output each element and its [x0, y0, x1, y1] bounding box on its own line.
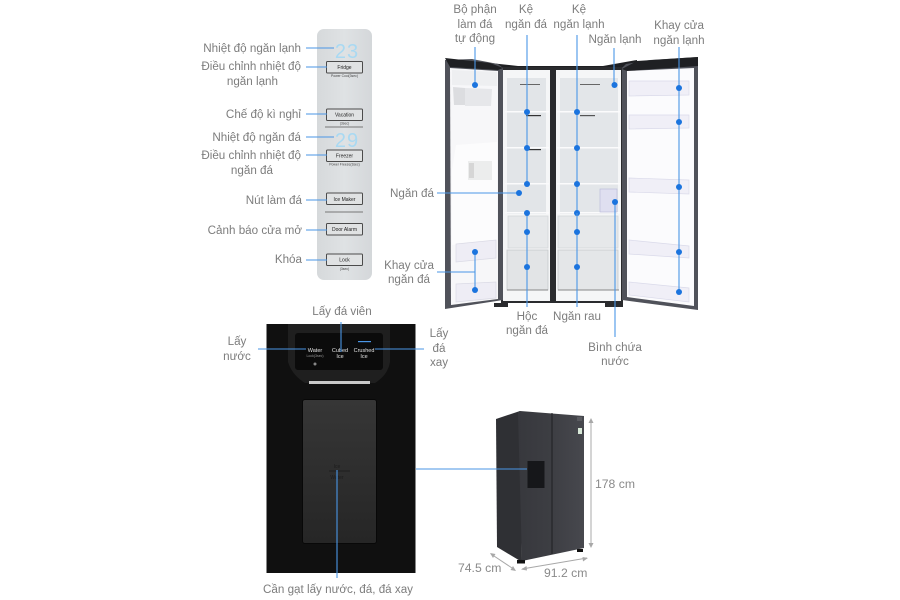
callout: fridge door tray: Khay cửa: [654, 19, 704, 32]
open refrigerator: [445, 57, 698, 310]
freezer compartment: [503, 70, 550, 301]
lock button: [326, 254, 362, 271]
callout: freezer compartment: [390, 187, 522, 200]
dimension: depth: [458, 553, 516, 575]
callout: water: nước: [223, 350, 251, 363]
label: adjust fridge temperature: Điều chỉnh nhiệt độ: [201, 60, 301, 73]
callout: vegetable drawer: Ngăn rau: [553, 310, 601, 323]
callout: fridge shelf: Kệ: [572, 3, 586, 16]
label: ice maker: [246, 194, 327, 207]
dispenser paddle: Water: [330, 475, 344, 481]
dispenser paddle: [302, 399, 377, 544]
dispenser display: Water: [308, 348, 322, 354]
callout: freezer door tray: [384, 249, 478, 293]
vacation button: Vacation: [335, 112, 354, 118]
freezer button: Power Freeze(3sec): [329, 162, 360, 166]
callouts: dispenser: [223, 305, 449, 596]
freezer button: Freezer: [336, 154, 353, 160]
freezer button: [326, 150, 362, 166]
dimension: depth: 74.5 cm: [458, 561, 501, 575]
callout: water tank: [588, 199, 642, 368]
callout: automatic ice maker: Bộ phận: [453, 3, 497, 16]
freezer temperature display: 29: [335, 130, 359, 152]
callout: crushed ice: xay: [430, 356, 448, 369]
dispenser display: Lock(3sec): [306, 354, 324, 358]
dimension: height: 178 cm: [595, 477, 635, 491]
ice maker button: Ice Maker: [334, 197, 356, 203]
callout: fridge door tray: [653, 19, 705, 295]
label: lock: [275, 253, 327, 266]
callout: freezer shelf: [505, 3, 548, 187]
panel body: [317, 29, 372, 280]
left door: [445, 58, 503, 309]
lock button: Lock: [339, 258, 350, 264]
dimension: height: [588, 418, 635, 548]
callout: crushed ice: đá: [433, 342, 446, 355]
lock button: (3sec): [340, 267, 349, 271]
callout: fridge shelf: ngăn lạnh: [553, 18, 605, 31]
right door: [622, 57, 698, 310]
fridge button: Fridge: [337, 65, 352, 71]
callout: fridge shelf: [553, 3, 605, 216]
callout: fridge compartment: Ngăn lạnh: [588, 33, 642, 46]
dispenser display: Cubed: [332, 348, 348, 354]
callout: freezer drawer: Hộc: [517, 310, 538, 323]
callout: crushed ice: Lấy: [430, 327, 449, 340]
fridge button: [326, 62, 362, 78]
label: freezer temperature: Nhiệt độ ngăn đá: [212, 131, 302, 144]
label: door alarm: Cảnh báo cửa mở: [208, 224, 302, 237]
label: ice maker: Nút làm đá: [246, 194, 303, 207]
vacation button: (3sec): [340, 122, 349, 126]
dispenser display: Crushed: [354, 348, 374, 354]
callout: automatic ice maker: tự động: [455, 32, 495, 45]
callout: water: [223, 335, 306, 363]
fridge compartment: [556, 70, 621, 301]
callout: water tank: nước: [601, 355, 629, 368]
control panel: [317, 29, 372, 280]
callout: cubed ice: [312, 305, 372, 352]
feet: [494, 303, 623, 307]
dimension: width: [521, 557, 588, 580]
dimensions: [458, 418, 635, 580]
callout: crushed ice: [375, 327, 449, 369]
label: adjust freezer temperature: ngăn đá: [231, 164, 274, 177]
dispenser display: [295, 333, 383, 370]
door gap: [551, 413, 553, 554]
door alarm button: [326, 224, 362, 235]
dispenser display: Ice: [336, 354, 344, 360]
fridge button: Power Cool(3sec): [331, 74, 358, 78]
callout: freezer shelf: Kệ: [519, 3, 533, 16]
front doors: [518, 411, 584, 561]
callout: freezer drawer: ngăn đá: [506, 324, 549, 337]
dispenser housing: [288, 324, 390, 383]
callout: fridge compartment: [588, 33, 642, 88]
callout: freezer shelf: ngăn đá: [505, 18, 548, 31]
fridge temperature display: 23: [335, 41, 359, 63]
label: adjust freezer temperature: [201, 149, 327, 177]
vacation button: [326, 109, 362, 126]
callout: freezer drawer: [506, 210, 549, 337]
cabinet: [490, 60, 637, 307]
callout: vegetable drawer: [553, 213, 601, 323]
ice and water niche: [528, 461, 544, 488]
callout: automatic ice maker: làm đá: [458, 18, 493, 31]
label: lock: Khóa: [275, 253, 303, 266]
label: vacation mode: Chế độ kì nghỉ: [226, 108, 301, 121]
callout: freezer door tray: ngăn đá: [388, 273, 431, 286]
callout: water tank: Bình chứa: [588, 341, 642, 354]
dispenser background: [266, 324, 416, 573]
callout: cubed ice: Lấy đá viên: [312, 305, 372, 318]
callout: fridge door tray: ngăn lạnh: [653, 34, 705, 47]
label: adjust fridge temperature: [201, 60, 327, 88]
feet: [517, 549, 583, 564]
callouts: open refrigerator: [384, 3, 705, 368]
control panel labels: [201, 42, 334, 266]
dispenser display: Ice: [360, 354, 368, 360]
dimension: width: 91.2 cm: [544, 566, 587, 580]
chrome bar: [309, 381, 370, 384]
callout: water: Lấy: [228, 335, 247, 348]
connector line: [416, 468, 527, 470]
callout: dispenser paddle: Cần gạt lấy nước, đá, đá xay: [263, 583, 413, 596]
energy sticker: [577, 417, 582, 434]
refrigerator exterior: [496, 411, 584, 564]
ice maker button: [326, 193, 362, 204]
callout: freezer door tray: Khay cửa: [384, 259, 434, 272]
dispenser paddle: Ice: [334, 464, 341, 470]
label: fridge temperature: Nhiệt độ ngăn lạnh: [203, 42, 301, 55]
callout: automatic ice maker: [453, 3, 497, 88]
label: adjust freezer temperature: Điều chỉnh nhiệt độ: [201, 149, 301, 162]
side panel: [496, 411, 522, 562]
label: adjust fridge temperature: ngăn lạnh: [227, 75, 278, 88]
callout: freezer compartment: Ngăn đá: [390, 187, 435, 200]
door alarm button: Door Alarm: [332, 227, 357, 233]
dispenser close-up: [266, 324, 416, 573]
